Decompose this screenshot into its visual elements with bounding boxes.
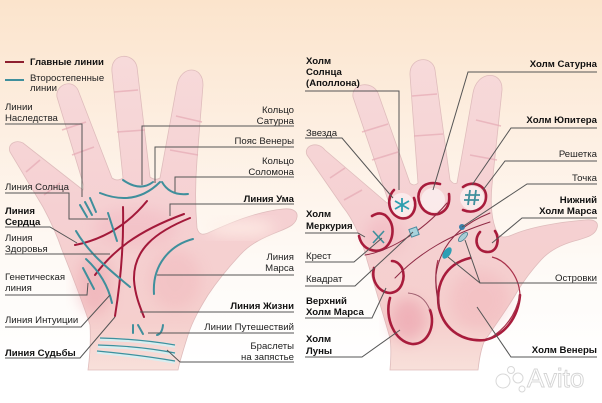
label: point xyxy=(462,173,598,227)
label: genetic line: Генетическая xyxy=(5,272,65,283)
label: ring of Saturn xyxy=(142,105,295,185)
label: Mars line: Марса xyxy=(265,263,295,274)
mounts: right hand circles xyxy=(359,183,520,344)
label: islands xyxy=(448,240,597,284)
label: travel lines: Линии Путешествий xyxy=(204,322,294,333)
label: ring of Saturn: Кольцо xyxy=(262,105,294,116)
label: upper mount of Mars: Верхний xyxy=(306,296,347,307)
label: mount of Apollo: Солнца xyxy=(306,67,342,78)
label: heart line: Линия xyxy=(5,206,35,217)
label: upper mount of Mars: Холм Марса xyxy=(306,307,365,318)
label: lower mount of Mars xyxy=(492,195,598,243)
label: head line: Линия Ума xyxy=(244,194,295,205)
legend: main lines: Главные линии xyxy=(30,57,104,68)
labels: left hand, right side xyxy=(140,105,295,363)
label: mount of Mercury: Меркурия xyxy=(306,221,353,232)
upper mount of Mars xyxy=(373,261,404,293)
label: islands: Островки xyxy=(555,273,597,284)
label: mount of the Moon: Холм xyxy=(306,334,331,345)
sign: islands xyxy=(440,231,469,260)
highlights around mounts xyxy=(390,186,484,217)
label: grid: Решетка xyxy=(559,149,598,160)
label: mount of Apollo: Холм xyxy=(306,56,331,67)
label: ring of Solomon xyxy=(175,156,295,192)
label: star xyxy=(305,128,393,198)
sign: grid xyxy=(464,190,480,205)
label: health line: Линия xyxy=(5,233,33,244)
label: lower mount of Mars: Нижний xyxy=(560,195,597,206)
sign: cross xyxy=(373,231,384,243)
sign: star xyxy=(395,198,409,212)
label: inheritance lines: Наследства xyxy=(5,113,59,124)
label: wrist bracelets: на запястье xyxy=(241,352,294,363)
label: wrist bracelets: Браслеты xyxy=(250,341,294,352)
mount of Saturn xyxy=(418,183,449,214)
label: cross xyxy=(305,238,382,262)
labels: left hand, left side xyxy=(5,102,115,359)
label: mount of Venus xyxy=(477,307,597,357)
label: fate line xyxy=(5,317,115,359)
mount of the Moon xyxy=(388,293,432,344)
left hand illustration xyxy=(9,56,297,370)
label: mount of Apollo: (Аполлона) xyxy=(306,78,360,89)
label: sun line xyxy=(5,182,108,219)
label: mount of Mercury xyxy=(305,209,365,237)
watermark: Avito xyxy=(496,363,584,393)
label: head line xyxy=(170,194,295,216)
sign: square xyxy=(409,227,419,237)
label: mount of Saturn: Холм Сатурна xyxy=(530,59,598,70)
label: upper mount of Mars xyxy=(305,288,386,318)
legend: secondary lines: линии xyxy=(30,83,57,94)
label: genetic line xyxy=(5,272,88,295)
label: square xyxy=(305,232,413,286)
legend xyxy=(5,57,104,94)
label: belt of Venus: Пояс Венеры xyxy=(234,136,294,147)
label: genetic line: линия xyxy=(5,283,32,294)
label: grid xyxy=(483,149,598,190)
label: mount of Jupiter xyxy=(472,115,598,185)
label: ring of Solomon: Соломона xyxy=(248,167,295,178)
label: mount of Jupiter: Холм Юпитера xyxy=(526,115,598,126)
label: belt of Venus xyxy=(155,136,294,183)
palm lines and signs: right hand xyxy=(365,190,490,310)
label: square: Квадрат xyxy=(306,274,343,285)
label: inheritance lines xyxy=(5,102,82,197)
legend: secondary lines xyxy=(5,73,104,94)
label: point: Точка xyxy=(572,173,598,184)
label: Mars line xyxy=(157,252,295,275)
label: lower mount of Mars: Холм Марса xyxy=(539,206,598,217)
labels: right hand, left side xyxy=(305,56,413,357)
label: cross: Крест xyxy=(306,251,332,262)
legend: secondary lines: Второстепенные xyxy=(30,73,104,84)
label: health line: Здоровья xyxy=(5,244,48,255)
label: mount of Venus: Холм Венеры xyxy=(532,345,597,356)
label: intuition line xyxy=(5,295,110,327)
label: heart line xyxy=(5,206,77,243)
palm lines: left hand major xyxy=(75,201,190,317)
label: mount of the Moon: Луны xyxy=(306,346,332,357)
mount of Venus xyxy=(436,257,520,340)
sign: point xyxy=(459,224,465,230)
label: health line xyxy=(5,233,110,255)
watermark: Avito: Avito xyxy=(527,363,584,393)
labels: right hand, right side xyxy=(433,59,598,357)
label: wrist bracelets xyxy=(167,341,294,363)
label: mount of the Moon xyxy=(305,330,400,357)
label: ring of Saturn: Сатурна xyxy=(257,116,295,127)
label: Mars line: Линия xyxy=(266,252,294,263)
label: heart line: Сердца xyxy=(5,217,41,228)
mount of Jupiter xyxy=(463,184,486,212)
right hand illustration xyxy=(306,60,597,370)
label: mount of Mercury: Холм xyxy=(306,209,331,220)
label: inheritance lines: Линии xyxy=(5,102,33,113)
label: ring of Solomon: Кольцо xyxy=(262,156,294,167)
label: star: Звезда xyxy=(306,128,338,139)
label: life line: Линия Жизни xyxy=(230,301,294,312)
label: fate line: Линия Судьбы xyxy=(5,348,76,359)
mount of Apollo xyxy=(389,190,415,218)
label: mount of Apollo xyxy=(305,56,399,190)
label: intuition line: Линия Интуиции xyxy=(5,315,78,326)
lower mount of Mars xyxy=(477,231,498,252)
mount of Mercury xyxy=(359,213,393,251)
label: sun line: Линия Солнца xyxy=(5,182,70,193)
palm lines: left hand secondary xyxy=(76,180,193,362)
label: mount of Saturn xyxy=(433,59,598,190)
